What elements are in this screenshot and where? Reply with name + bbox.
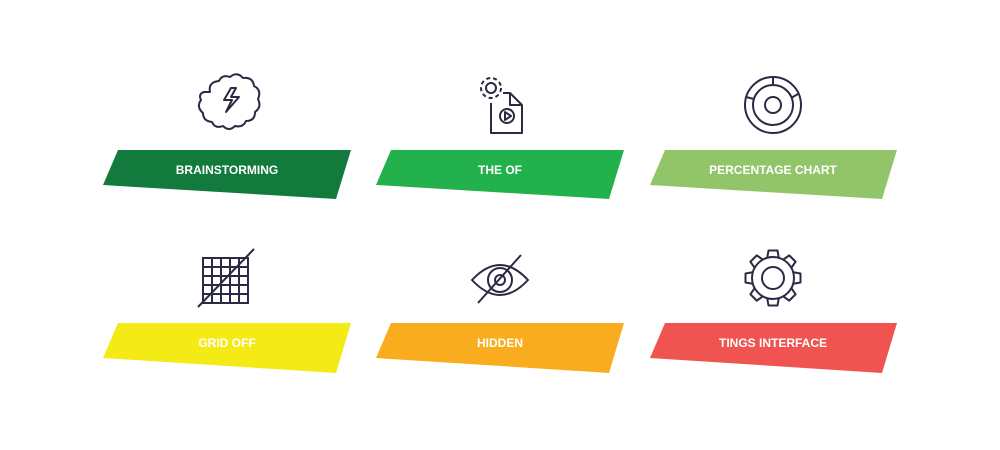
icon: hidden: [472, 255, 528, 303]
banner: grid off: [103, 323, 351, 373]
banner: the of: THE OF: [478, 163, 522, 177]
banner: hidden: [376, 323, 624, 373]
icon: percentage chart: [745, 77, 801, 133]
icon: grid off: [198, 249, 254, 307]
banner: tings interface: TINGS INTERFACE: [719, 336, 827, 350]
banner: percentage chart: [650, 150, 897, 199]
banner: grid off: GRID OFF: [198, 336, 256, 350]
banner: the of: [376, 150, 624, 199]
banner: percentage chart: PERCENTAGE CHART: [709, 163, 838, 177]
banner: brainstorming: [103, 150, 351, 199]
banner: tings interface: [650, 323, 897, 373]
icon: brainstorming: [199, 74, 259, 129]
icon: the of: [481, 78, 522, 133]
banner: brainstorming: BRAINSTORMING: [176, 163, 278, 177]
banner: hidden: HIDDEN: [477, 336, 523, 350]
icon: settings gear: [746, 250, 800, 306]
